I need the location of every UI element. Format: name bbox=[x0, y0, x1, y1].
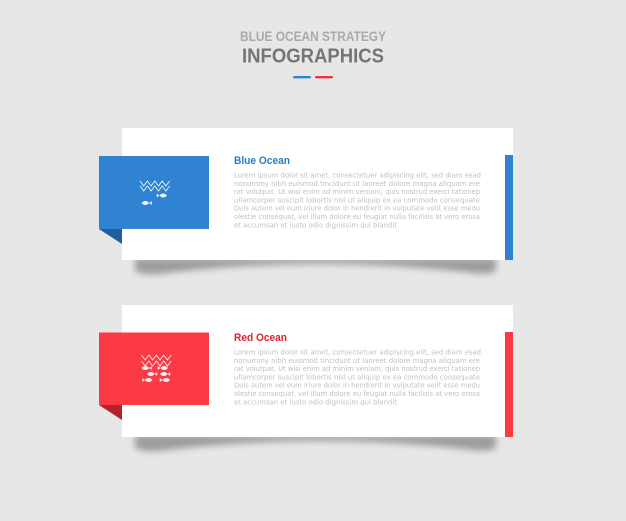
fold bbox=[99, 229, 122, 244]
white card bbox=[122, 305, 513, 437]
body text: nonummy nibh euismod tincidunt ut laoreet dolore magna aliquam ere bbox=[234, 356, 480, 365]
panel: Red Ocean bbox=[99, 305, 513, 451]
body text bbox=[234, 170, 481, 229]
right accent bar bbox=[505, 332, 513, 437]
body text: nonummy nibh euismod tincidunt ut laoreet dolore magna aliquam ere bbox=[234, 179, 480, 188]
card shadow bbox=[135, 435, 496, 451]
heading: Infographics: INFOGRAPHICS bbox=[242, 44, 384, 68]
title bbox=[240, 29, 386, 78]
card shadow bbox=[135, 258, 496, 274]
fold bbox=[99, 405, 122, 420]
white card bbox=[122, 128, 513, 260]
panel: Blue Ocean bbox=[99, 128, 513, 274]
subtitle: Blue Ocean Strategy: BLUE OCEAN STRATEGY bbox=[240, 29, 386, 44]
body text: ullamcorper suscipit lobortis nisl ut aliquip ex ea commodo consequate bbox=[234, 195, 480, 204]
body text: Lorem ipsum dolor sit amet, consectetuer adipiscing elit, sed diam esad bbox=[234, 348, 481, 356]
icon: waves and many fish bbox=[142, 355, 171, 382]
blue tag bbox=[99, 156, 209, 229]
body text: Duis autem vel eum iriure dolor in hendrerit in vulputate velit esse medu bbox=[234, 204, 480, 213]
body text: olestie consequat, vel illum dolore eu feugiat nulla facilisis at vero erosa bbox=[234, 389, 480, 398]
body text: olestie consequat, vel illum dolore eu feugiat nulla facilisis at vero erosa bbox=[234, 212, 480, 221]
body text: Duis autem vel eum iriure dolor in hendrerit in vulputate velit esse medu bbox=[234, 381, 480, 390]
body text: Lorem ipsum dolor sit amet, consectetuer adipiscing elit, sed diam esad bbox=[234, 170, 481, 180]
heading: Blue Ocean: Blue Ocean bbox=[234, 155, 290, 167]
right accent bar bbox=[505, 155, 513, 260]
red tag bbox=[99, 332, 209, 405]
body text bbox=[234, 348, 481, 406]
body text: et accumsan et iusto odio dignissim qui blandit bbox=[234, 220, 397, 229]
heading: Red Ocean: Red Ocean bbox=[234, 332, 287, 344]
body text: ullamcorper suscipit lobortis nisl ut aliquip ex ea commodo consequate bbox=[234, 372, 480, 381]
accent dashes bbox=[293, 76, 333, 78]
body text: rat volutpat. Ut wisi enim ad minim veniam, quis nostrud exerci tationep bbox=[234, 187, 480, 196]
icon: waves and fish bbox=[140, 181, 170, 205]
body text: rat volutpat. Ut wisi enim ad minim veniam, quis nostrud exerci tationep bbox=[234, 364, 480, 373]
body text: et accumsan et iusto odio dignissim qui blandit bbox=[234, 397, 397, 406]
